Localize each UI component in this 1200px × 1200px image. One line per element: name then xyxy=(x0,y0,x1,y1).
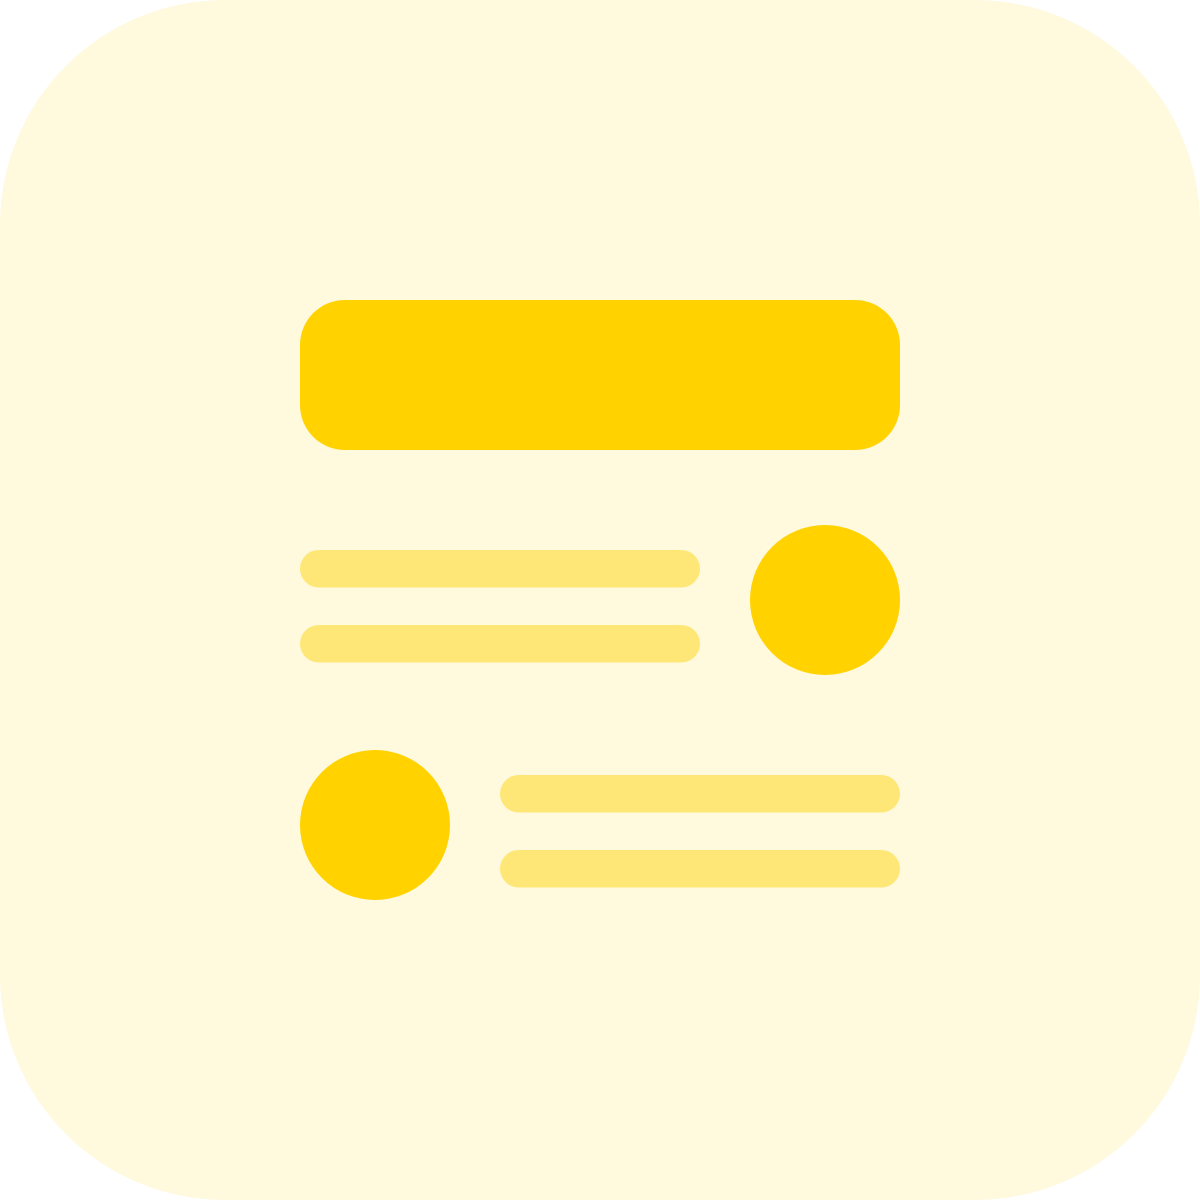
row 2: text lines xyxy=(500,775,900,888)
row 1: circle xyxy=(750,525,900,675)
row 1: text lines xyxy=(300,550,700,662)
header banner xyxy=(300,300,900,450)
row 2: circle xyxy=(300,750,450,900)
